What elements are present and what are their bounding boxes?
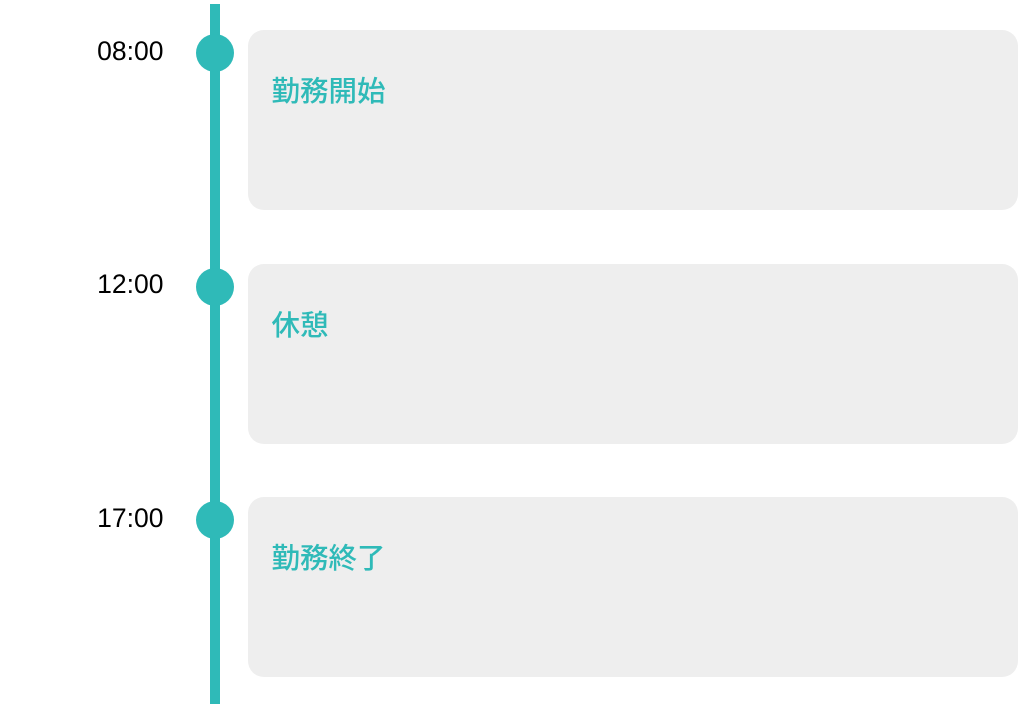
card: start of work (248, 30, 1018, 210)
card: end of work (248, 497, 1018, 677)
timeline vertical line (210, 4, 220, 704)
marker dot: 17:00 (196, 501, 234, 539)
card heading: end of work: 勤務終了 (272, 542, 386, 574)
timeline entry: 17:00 (97, 497, 1018, 677)
time label: 08:00: 08:00 (97, 36, 164, 66)
marker dot: 08:00 (196, 34, 234, 72)
card: break (248, 264, 1018, 444)
timeline entry: 08:00 (97, 30, 1018, 210)
card heading: start of work: 勤務開始 (272, 76, 386, 108)
time label: 12:00: 12:00 (97, 269, 164, 299)
time label: 17:00: 17:00 (97, 503, 164, 533)
marker dot: 12:00 (196, 268, 234, 306)
card heading: break: 休憩 (272, 310, 329, 342)
timeline entry: 12:00 (97, 264, 1018, 444)
